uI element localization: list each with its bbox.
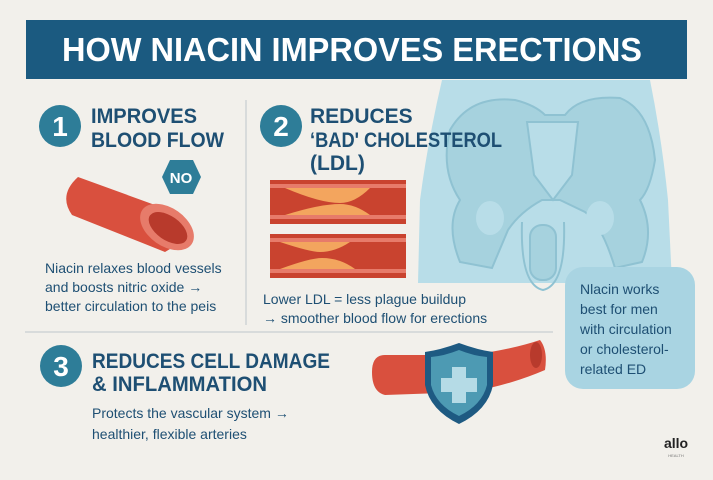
callout: with circulation: [579, 321, 672, 337]
panel: reduces cell damage: healthier, flexible arteries: [92, 426, 247, 442]
panel: reduces cell damage: REDUCES CELL DAMAGE: [92, 350, 330, 373]
pelvis illustration: [418, 80, 672, 290]
panel: reduces LDL: REDUCES: [310, 105, 413, 128]
callout: related ED: [580, 361, 646, 377]
callout: best for men: [580, 301, 658, 317]
title: HOW NIACIN IMPROVES ERECTIONS: [62, 31, 642, 68]
logo: allo: [664, 435, 688, 451]
panel: reduces LDL: 2: [273, 111, 289, 142]
chart: artery cross sections: [270, 180, 406, 278]
panel: reduces LDL: Lower LDL = less plague buildup: [263, 291, 466, 307]
panel: improves blood flow: IMPROVES: [91, 105, 197, 128]
panel: improves blood flow: BLOOD FLOW: [91, 129, 224, 152]
panel: improves blood flow: Niacin relaxes blood vessels: [45, 260, 222, 276]
panel: reduces cell damage: 3: [53, 351, 69, 382]
panel: reduces LDL: ‘BAD' CHOLESTEROL: [310, 129, 502, 152]
panel: improves blood flow: [39, 105, 224, 314]
panel: improves blood flow: and boosts nitric oxide →: [45, 279, 202, 295]
icon: NO hexagon: [162, 160, 201, 194]
panel: reduces cell damage: Protects the vascular system →: [92, 405, 289, 421]
panel: reduces cell damage: & INFLAMMATION: [92, 373, 267, 396]
panel: reduces LDL: → smoother blood flow for erections: [263, 310, 487, 326]
panel: reduces LDL: [260, 105, 502, 326]
panel: reduces LDL: (LDL): [310, 152, 365, 175]
icon: shield on vessel: [372, 340, 546, 424]
icon: blood vessel: [66, 177, 202, 260]
title: [26, 20, 687, 79]
callout: Nlacin works: [580, 281, 659, 297]
logo: HEALTH: [668, 453, 684, 458]
panel: improves blood flow: 1: [52, 111, 68, 142]
callout: or cholesterol-: [580, 341, 669, 357]
logo: [664, 435, 688, 458]
panel: reduces cell damage: [40, 345, 330, 442]
icon: NO hexagon: NO: [170, 170, 193, 187]
callout: [565, 267, 695, 389]
panel: improves blood flow: better circulation to the peis: [45, 298, 216, 314]
